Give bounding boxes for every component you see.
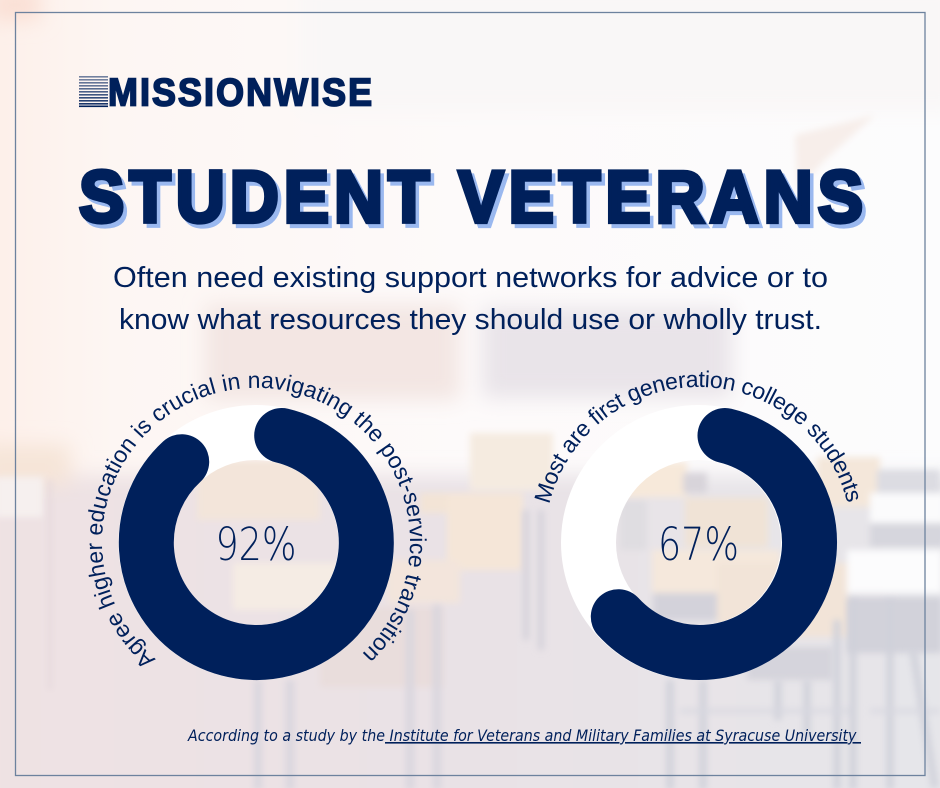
donut value arc	[618, 436, 810, 653]
curved label: Most are first generation college students	[534, 370, 858, 503]
logo: Missionwise	[79, 70, 372, 114]
donut value arc	[146, 436, 366, 653]
donut chart: 92%	[88, 374, 427, 680]
subtitle line 1: Often need existing support networks for advice or to	[113, 262, 828, 294]
value: 92%	[216, 518, 296, 571]
donut chart: 67%	[534, 370, 858, 680]
source link: Institute for Veterans and Military Families at Syracuse University	[385, 726, 861, 745]
icon: striped square	[79, 76, 108, 107]
title shadow: STUDENT VETERANS	[82, 160, 866, 242]
donut track	[146, 432, 366, 652]
source lead-in: According to a study by the	[187, 726, 385, 745]
wordmark: MISSIONWISE	[108, 70, 372, 114]
subtitle line 2: know what resources they should use or wholly trust.	[119, 304, 822, 336]
subtitle	[113, 262, 828, 336]
donut track	[588, 432, 808, 652]
title text: STUDENT VETERANS	[79, 156, 863, 238]
source note	[187, 726, 861, 745]
curved label: Agree higher education is crucial in navigating the post-service transition	[88, 374, 427, 666]
value: 67%	[658, 518, 739, 571]
title: Student Veterans	[79, 156, 866, 242]
